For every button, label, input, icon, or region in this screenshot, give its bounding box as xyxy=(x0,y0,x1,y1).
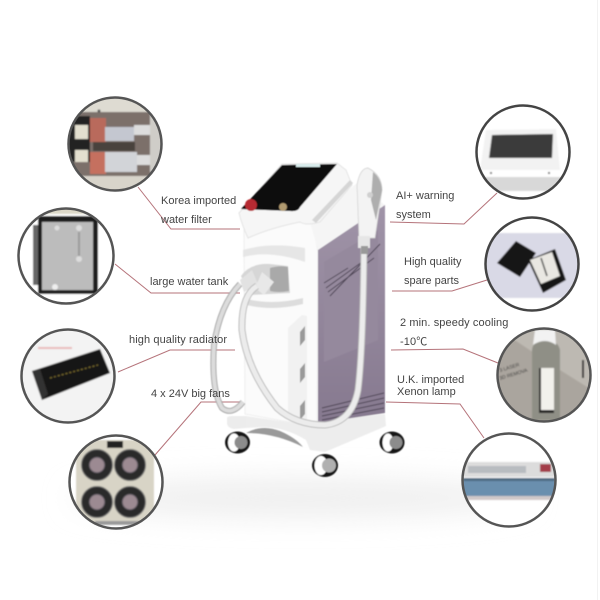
label: spare parts: spare parts xyxy=(404,275,460,287)
panel vents xyxy=(322,244,384,420)
line: radiator xyxy=(118,350,235,372)
key switch xyxy=(279,203,287,211)
circle photo: water filter xyxy=(68,97,162,192)
machine base xyxy=(227,414,386,452)
right page edge line xyxy=(597,0,598,600)
line: fans xyxy=(155,402,240,455)
circle photo: cooling handpiece xyxy=(498,328,592,423)
line: cooling xyxy=(391,349,498,363)
line: water tank xyxy=(115,264,240,293)
black screen xyxy=(241,164,337,211)
label: warning system: system xyxy=(396,209,431,221)
body door xyxy=(288,315,307,424)
wheels xyxy=(225,432,404,477)
line: warning system xyxy=(390,193,497,224)
head unit xyxy=(239,163,352,238)
line: water filter xyxy=(138,187,240,229)
wheel right xyxy=(380,432,404,454)
cable right xyxy=(242,245,364,425)
circle photo: water tank xyxy=(18,208,114,304)
main machine xyxy=(213,163,404,477)
circle photo: radiator xyxy=(20,329,116,423)
circle photo: xenon lamp xyxy=(462,434,556,526)
label: water filter: water filter xyxy=(160,214,212,226)
circle photo: cooling handpiece: 3 LASER xyxy=(499,362,521,374)
body vents xyxy=(300,326,305,420)
side handle xyxy=(312,180,353,223)
wheel left xyxy=(225,432,250,454)
shelf xyxy=(243,245,305,262)
column top xyxy=(310,183,385,250)
label: fans: 4 x 24V big fans xyxy=(151,388,230,400)
purple side panel xyxy=(318,205,385,423)
machine body xyxy=(244,218,318,424)
line: spare parts xyxy=(392,280,487,291)
line: xenon lamp xyxy=(386,402,484,438)
label: xenon lamp: U.K. imported xyxy=(397,374,464,386)
floor shadow xyxy=(70,478,530,518)
label: xenon lamp: Xenon lamp xyxy=(397,386,456,398)
stop button xyxy=(245,199,257,211)
holder bowl xyxy=(243,298,303,308)
circle photo: cooling handpiece: 3D REMOVA xyxy=(499,367,529,382)
label: spare parts: High quality xyxy=(404,256,461,268)
label: warning system: AI+ warning xyxy=(396,190,454,202)
label: water filter: Korea imported xyxy=(161,195,236,207)
cable left xyxy=(213,284,243,411)
wheel front xyxy=(312,454,338,477)
label: radiator: high quality radiator xyxy=(129,334,227,346)
circle photo: spare parts xyxy=(485,217,579,311)
handpiece holder xyxy=(240,264,290,295)
label: cooling: -10℃ xyxy=(400,336,427,348)
label: cooling: 2 min. speedy cooling xyxy=(400,317,508,329)
panel inset xyxy=(324,230,378,362)
circle photo: touch screen xyxy=(476,105,570,199)
label: water tank: large water tank xyxy=(150,276,229,288)
circle photo: fans xyxy=(68,434,164,530)
callout lines xyxy=(115,187,498,455)
light strip xyxy=(296,164,320,167)
handpiece xyxy=(357,168,382,254)
